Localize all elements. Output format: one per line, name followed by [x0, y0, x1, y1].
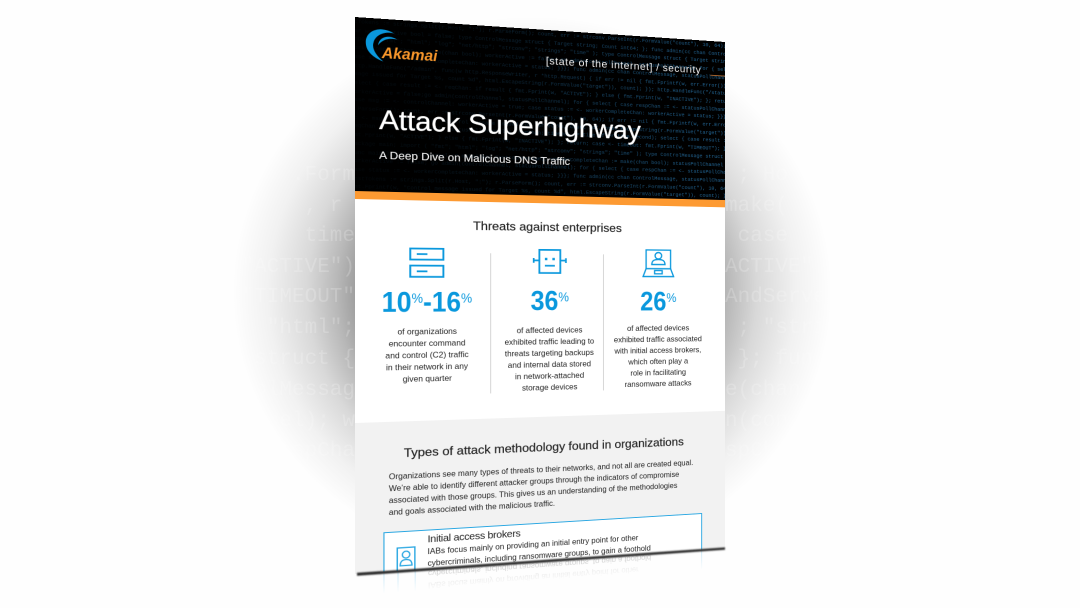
stat description: [504, 326, 594, 393]
stat column 2: [504, 248, 594, 393]
intro paragraph: [388, 458, 693, 517]
subtitle: A Deep Dive on Malicious DNS Traffic: [379, 150, 570, 168]
section heading: threats against enterprises: Threats against enterprises: [473, 219, 622, 235]
mirrored reflection of page bottom: [383, 550, 702, 591]
divider: [602, 254, 604, 390]
card title: Initial access brokers: [428, 528, 520, 545]
card body: cybercriminals, including ransomware groups, to gain a foothold: [428, 543, 651, 567]
stat description: encounter command: [389, 338, 465, 348]
Akamai logo: [365, 29, 445, 66]
stat description: which often play a: [628, 357, 688, 367]
stat description: role in facilitating: [630, 368, 686, 378]
icon: broker badge: [396, 546, 416, 571]
stat description: in network-attached: [515, 371, 584, 381]
report series label: [state of the internet] / security: [546, 56, 701, 76]
intro paragraph: and goals associated with the malicious traffic.: [389, 499, 555, 517]
stat column 1: [382, 248, 472, 384]
stat: 10%-16%: 10%-16%: [382, 287, 472, 319]
background code text right: }; fun: [738, 348, 813, 371]
background code text right: ; Ho: [738, 164, 788, 187]
stat description: [385, 327, 469, 384]
background code text left: respCha: [267, 440, 355, 463]
stat description: threats targeting backups: [505, 348, 594, 358]
stat description: in their network in any: [386, 362, 468, 372]
card: initial access brokers: [383, 513, 702, 578]
background code text left: ntrolMessag: [216, 379, 355, 402]
background code text right: ; "stri: [738, 317, 826, 340]
header panel: [355, 17, 725, 200]
background code text left: nel); w: [267, 410, 355, 433]
stat description: storage devices: [522, 383, 577, 393]
intro paragraph: We’re able to identify different attacker groups through the indicators of compromise: [389, 470, 679, 493]
stat description: and internal data stored: [508, 360, 591, 370]
panel: attack methodology: [355, 411, 725, 574]
stat description: exhibited traffic leading to: [505, 337, 594, 347]
intro paragraph: Organizations see many types of threats to their networks, and not all are created equal.: [389, 458, 693, 481]
stat description: exhibited traffic associated: [614, 335, 702, 344]
background code text right: n(cont: [725, 410, 801, 433]
background code text right: ACTIVE": [725, 256, 813, 279]
Akamai logo: Akamai: [383, 44, 445, 66]
main title: Attack Superhighway: [379, 104, 641, 145]
stat column 3: [614, 249, 702, 389]
background code text left: "html";: [267, 317, 355, 340]
stat description: of affected devices: [517, 326, 583, 335]
background code text left: .Form: [292, 164, 355, 187]
infographic page: [355, 17, 725, 574]
orange accent line: [710, 75, 725, 76]
background code text right: case: [738, 225, 788, 248]
stat description: of affected devices: [627, 324, 689, 333]
orange band: [355, 191, 725, 207]
divider: [490, 253, 491, 393]
stat description: of organizations: [397, 327, 457, 336]
stat description: ransomware attacks: [625, 379, 692, 389]
card body: [428, 533, 651, 568]
background code text right: make(: [725, 195, 788, 218]
icon: server: [409, 248, 444, 278]
card body: IABs focus mainly on providing an initial entry point for other: [428, 533, 638, 556]
background code text right: AndServe: [725, 286, 826, 309]
mirrored reflection of page bottom: IABs focus mainly on providing an initial entry point for other: [428, 565, 639, 589]
section heading: attack methodology: Types of attack methodology found in organizations: [404, 435, 684, 460]
stat description: and control (C2) traffic: [385, 350, 469, 360]
background code text right: spCh: [725, 440, 775, 463]
background code text left: "TIMEOUT": [242, 286, 355, 309]
background code text left: struct {: [254, 348, 355, 371]
background code text left: , r: [305, 195, 342, 218]
background code text left: time: [305, 225, 355, 248]
stat description: with initial access brokers,: [614, 346, 701, 356]
stat description: [614, 324, 702, 389]
stat description: given quarter: [403, 374, 452, 384]
stat: 26%: 26%: [640, 287, 676, 317]
mirrored reflection of page bottom: cybercriminals, including ransomware groups, to gain a foothold: [428, 553, 651, 578]
background code text left: "ACTIVE"): [242, 256, 355, 279]
icon: robot: [532, 248, 567, 274]
intro paragraph: associated with those groups. This gives us an understanding of the methodologies: [389, 481, 677, 505]
background code text right: e(chan: [725, 379, 801, 402]
stat: 36%: 36%: [531, 286, 569, 316]
icon: laptop user: [642, 249, 674, 278]
